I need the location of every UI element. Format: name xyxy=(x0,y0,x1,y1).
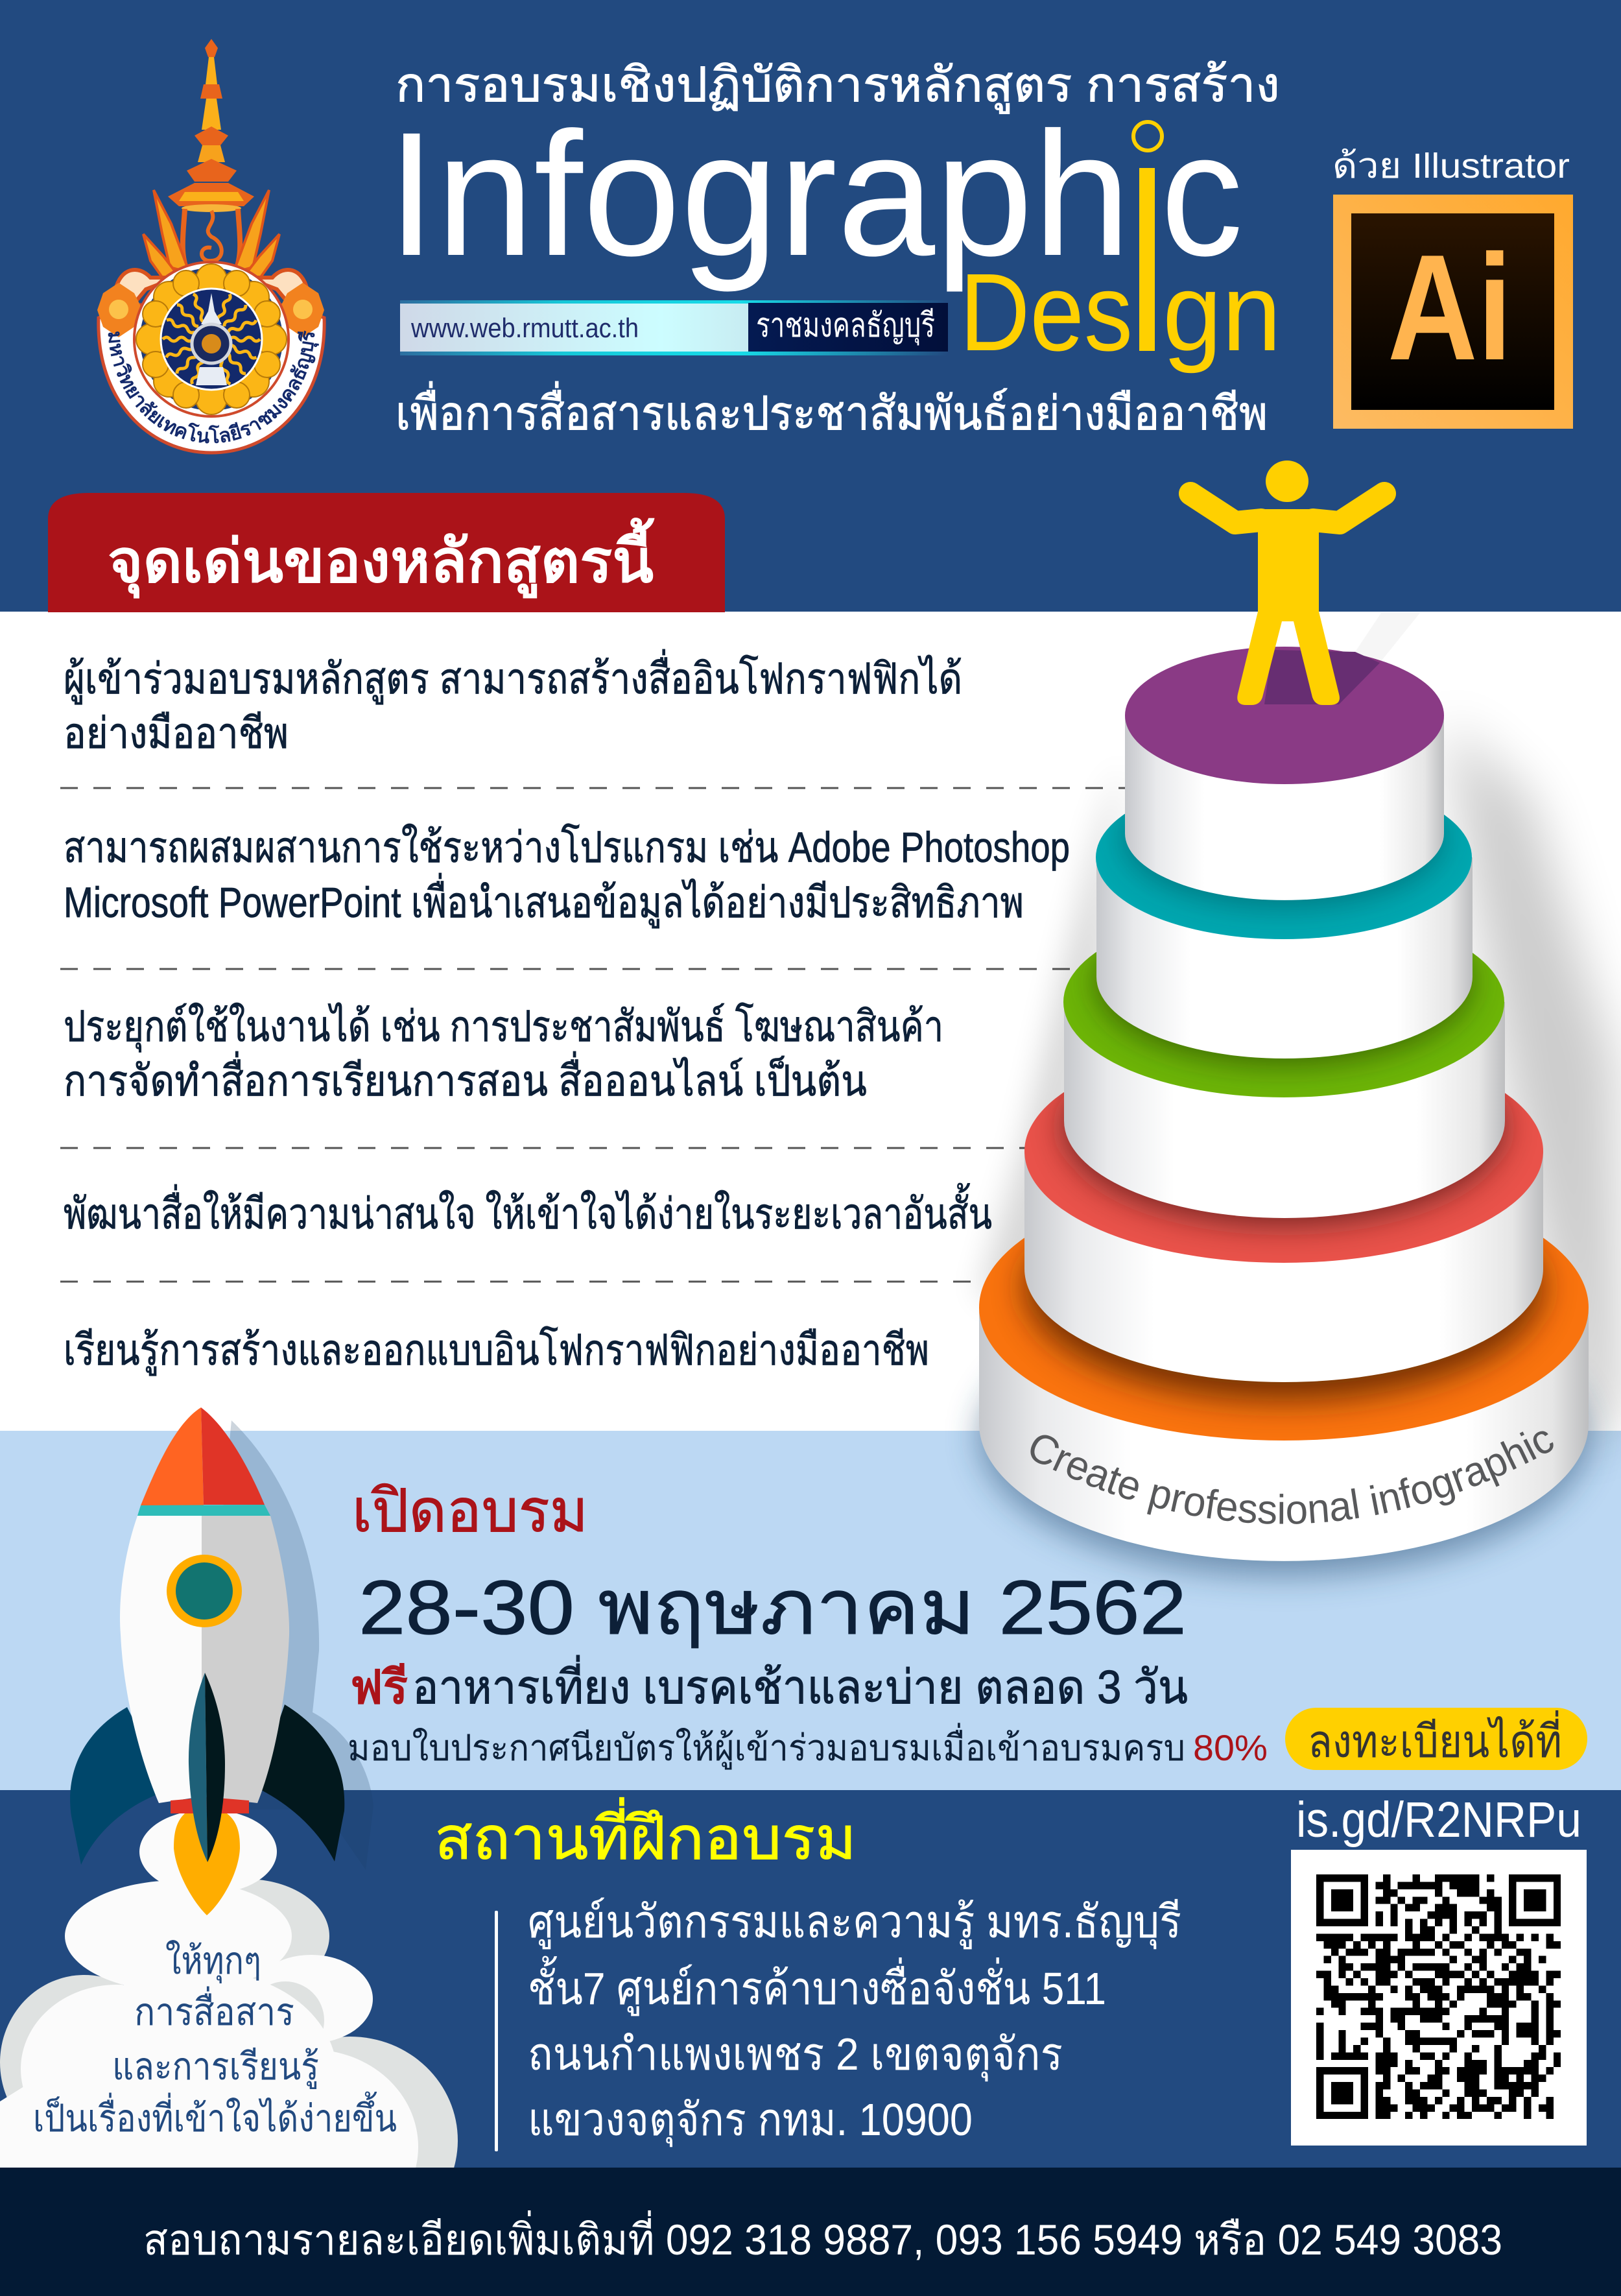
rocket ring xyxy=(171,1797,249,1813)
tier one purple xyxy=(1125,647,1444,900)
tier five orange xyxy=(979,1238,1589,1561)
footer band xyxy=(0,2168,1621,2296)
tiered pyramid xyxy=(958,460,1621,1602)
venue address xyxy=(528,1896,1181,2147)
logo university name: มหาวิทยาลัยเทคโนโลยีราชมงคลธัญบุรี xyxy=(108,331,319,444)
register pill: ลงทะเบียนได้ที่ xyxy=(1308,1710,1562,1767)
highlight three: ประยุกต์ใช้ในงานได้ เช่น การประชาสัมพันธ์ โฆษณาสินค้า xyxy=(64,1002,943,1053)
logo side flowers xyxy=(97,283,324,337)
certificate line: 80% xyxy=(1193,1727,1268,1768)
training dates: 28-30 พฤษภาคม 2562 xyxy=(359,1565,1187,1651)
website address bar: www.web.rmutt.ac.th xyxy=(410,313,639,343)
title word Design xyxy=(960,251,1281,374)
yellow letter i shared by both title words xyxy=(1133,122,1162,351)
title word Design: Des xyxy=(960,251,1133,374)
cloud message xyxy=(33,1939,397,2140)
white highlights band xyxy=(0,612,1621,1431)
navy venue band xyxy=(0,1790,1621,2168)
footer contact line: สอบถามรายละเอียดเพิ่มเติมที่ 092 318 9887, 093 156 5949 หรือ 02 549 3083 xyxy=(143,2210,1502,2264)
title line three: เพื่อการสื่อสารและประชาสัมพันธ์อย่างมืออาชีพ xyxy=(396,381,1268,440)
venue divider xyxy=(495,1911,498,2151)
highlights heading tab: จุดเด่นของหลักสูตรนี้ xyxy=(108,518,655,599)
highlight five: เรียนรู้การสร้างและออกแบบอินโฟกราฟฟิกอย่างมืออาชีพ xyxy=(64,1326,929,1376)
venue address: ศูนย์นวัตกรรมและความรู้ มทร.ธัญบุรี xyxy=(528,1896,1181,1950)
venue heading: สถานที่ฝึกอบรม xyxy=(434,1797,857,1872)
highlight two: สามารถผสมผสานการใช้ระหว่างโปรแกรม เช่น Adobe Photoshop xyxy=(64,823,1070,871)
header background band xyxy=(0,0,1621,613)
tier three green xyxy=(1063,952,1505,1218)
university logo xyxy=(97,39,326,454)
highlights heading tab xyxy=(48,493,725,612)
highlight four: พัฒนาสื่อให้มีความน่าสนใจ ให้เข้าใจได้ง่ายในระยะเวลาอันสั้น xyxy=(64,1183,992,1238)
highlight one xyxy=(64,649,962,757)
cloud message: ให้ทุกๆ xyxy=(165,1939,261,1984)
title word Design: gn xyxy=(1163,251,1281,374)
highlight two xyxy=(64,823,1070,929)
website address bar: ราชมงคลธัญบุรี xyxy=(756,307,935,346)
logo spire xyxy=(168,39,254,212)
icon: Adobe Illustrator: Ai xyxy=(1388,224,1512,392)
highlight two: Microsoft PowerPoint เพื่อนำเสนอข้อมูลได้อย่างมีประสิทธิภาพ xyxy=(64,873,1024,929)
left fin xyxy=(70,1707,169,1865)
training opens label: เปิดอบรม xyxy=(352,1478,588,1544)
right fin xyxy=(256,1704,344,1861)
smoke cloud xyxy=(0,1813,458,2168)
rocket flame xyxy=(174,1813,240,1915)
certificate line: มอบใบประกาศนียบัตรให้ผู้เข้าร่วมอบรมเมื่อเข้าอบรมครบ xyxy=(348,1723,1185,1770)
logo side nagas xyxy=(115,190,307,305)
with Illustrator label: ด้วย Illustrator xyxy=(1332,147,1570,185)
yellow figure on top xyxy=(1190,460,1384,705)
tier four red xyxy=(1024,1092,1543,1382)
venue address: แขวงจตุจักร กทม. 10900 xyxy=(528,2094,973,2147)
logo ribbon xyxy=(99,305,324,453)
tier two teal xyxy=(1096,813,1473,1058)
rocket centre fin xyxy=(189,1673,225,1862)
short link: is.gd/R2NRPu xyxy=(1296,1792,1581,1848)
rocket body xyxy=(120,1516,289,1803)
logo seal xyxy=(134,262,289,416)
free meals line: อาหารเที่ยง เบรคเช้าและบ่าย ตลอด 3 วัน xyxy=(412,1655,1188,1714)
rocket window xyxy=(167,1555,242,1627)
highlights list xyxy=(64,649,1070,1376)
rocket nose xyxy=(137,1407,270,1516)
highlight one: ผู้เข้าร่วมอบรมหลักสูตร สามารถสร้างสื่ออินโฟกราฟฟิกได้ xyxy=(64,649,962,705)
figure shadow xyxy=(1264,613,1420,704)
light blue schedule band xyxy=(0,1431,1621,1791)
cloud message: การสื่อสาร xyxy=(134,1986,294,2033)
cloud message: เป็นเรื่องที่เข้าใจได้ง่ายขึ้น xyxy=(33,2092,397,2140)
highlight three: การจัดทำสื่อการเรียนการสอน สื่อออนไลน์ เป็นต้น xyxy=(64,1051,867,1105)
free meals line: ฟรี xyxy=(350,1662,408,1714)
base curved caption: Create professional infographic xyxy=(1030,1431,1554,1524)
venue address: ชั้น7 ศูนย์การค้าบางซื่อจังชั่น 511 xyxy=(528,1955,1106,2016)
pyramid cast shadows xyxy=(979,720,1621,1576)
website address bar xyxy=(400,300,948,355)
rocket shadow xyxy=(195,1420,373,1870)
title word Infographic: Infograph xyxy=(387,95,1131,293)
highlight three xyxy=(64,1002,943,1105)
icon: Adobe Illustrator xyxy=(1333,195,1573,429)
venue address: ถนนกำแพงเพชร 2 เขตจตุจักร xyxy=(528,2029,1063,2082)
QR code xyxy=(1291,1850,1587,2146)
title line one: การอบรมเชิงปฏิบัติการหลักสูตร การสร้าง xyxy=(396,58,1280,114)
rocket xyxy=(0,1407,458,2244)
title word Infographic: c xyxy=(1161,95,1243,293)
highlight one: อย่างมืออาชีพ xyxy=(64,709,289,757)
cloud message: และการเรียนรู้ xyxy=(112,2046,319,2089)
